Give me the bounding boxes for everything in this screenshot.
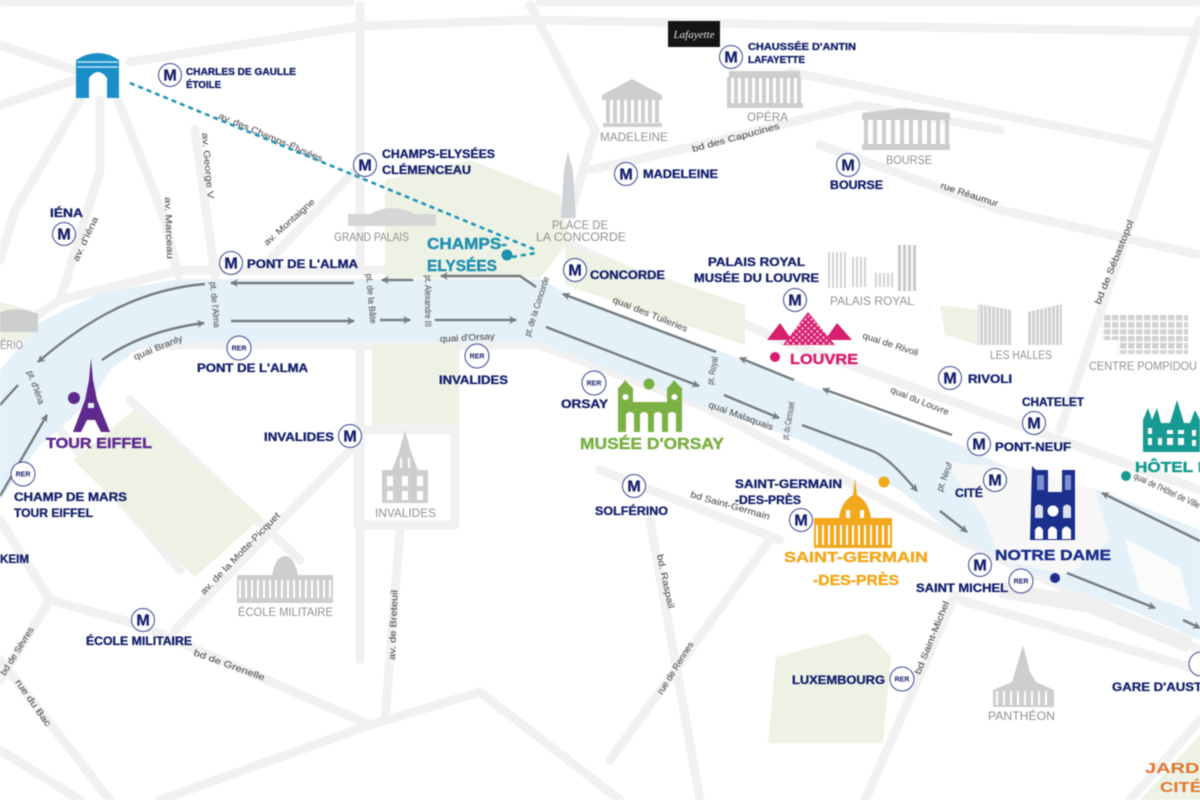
station: Bir-Hakeim: KEIM [0,552,29,566]
south quay [1000,590,1190,645]
station: Concorde: M [568,262,582,280]
street names: bd de Sébastopol [1093,219,1136,306]
label: Jardin Cité: CITÉ [1160,779,1200,796]
station: Iéna [50,205,83,246]
station: Rivoli: M [943,370,957,388]
station: Pont-Neuf: M [972,436,986,454]
icon: Trocadéro: ÉRIO [0,337,23,352]
station: Charles de Gaulle Étoile: M [163,68,177,84]
station: Champs-Élysées Clemenceau: CLÉMENCEAU [382,162,471,177]
icon: Bourse: BOURSE [886,153,932,167]
station: Invalides (métro): M [343,428,357,446]
dashed route: Champs-Élysées [130,83,536,250]
street names: pt. Alexandre III [423,275,433,327]
station: Orsay (RER): ORSAY [561,397,608,411]
station: Invalides (métro): INVALIDES [264,430,334,444]
street names: av. d'Iéna [71,215,100,263]
station: Champs-Élysées Clemenceau: CHAMPS-ELYSÉES [382,146,495,161]
street names: pt. de l'Alma [208,281,222,328]
station: Concorde [564,258,665,282]
icon: Les Halles [978,304,1062,362]
street names: av. des Champs-Élysées [217,111,325,164]
icon: École Militaire: ÉCOLE MILITAIRE [238,604,333,619]
station: Bourse [830,154,883,192]
station: Madeleine [614,162,718,186]
street names: rue de Rennes [655,639,696,696]
icon: Palais Royal: PALAIS ROYAL [830,294,914,308]
station: Gare d'Austerlitz: GARE D'AUST [1112,680,1200,694]
dashed route end [512,253,536,257]
station: Concorde: CONCORDE [590,268,665,282]
label: Champs-Élysées [427,236,512,275]
icon: Grand Palais: GRAND PALAIS [334,230,409,244]
street names: quai d'Orsay [440,331,496,344]
Île de la Cité [945,462,1110,575]
station: Chaussée d'Antin Lafayette: M [724,50,738,66]
station: Palais Royal Musée du Louvre: M [788,292,802,310]
arrows: Seine boat route [0,276,1200,628]
station: Luxembourg: RER [895,676,909,684]
label: Place de la Concorde [536,218,626,244]
station: Pont de l'Alma (métro) [220,252,358,274]
station: Invalides (RER) [439,344,508,387]
label: Place de la Concorde: LA CONCORDE [536,230,626,244]
street names: quai Malaquais [707,399,775,432]
icon: Bourse [862,108,950,167]
station: Madeleine: MADELEINE [643,167,718,181]
icon: Arc de Triomphe [76,53,119,98]
icon: Hôtel de Ville: HÔTEL D [1135,458,1200,476]
station: Pont-Neuf: PONT-NEUF [995,440,1071,454]
station: Invalides (métro) [264,424,362,448]
station: Chaussée d'Antin Lafayette [720,40,856,68]
icon: obélisque Concorde [561,152,576,218]
icon: Opéra: OPÉRA [747,109,788,124]
street names: rue du Bac [13,677,53,729]
street names: pt. Royal [705,356,720,385]
label: Jardin Cité [1145,760,1200,796]
station: Chatelet [1022,395,1085,434]
station: Pont de l'Alma (métro): M [224,256,238,272]
station: École Militaire: ÉCOLE MILITAIRE [86,633,192,648]
street names: bd de Grenelle [192,647,266,683]
icon: Hôtel de Ville [1121,400,1200,481]
label: Champs-Élysées: ELYSÉES [427,256,497,275]
station: Orsay (RER): RER [587,380,601,388]
icon: Tour Eiffel [46,358,152,452]
station: Saint Michel: RER [1014,578,1028,586]
icon: Invalides [375,430,436,520]
station: Orsay (RER) [561,371,608,411]
Seine river [0,279,1200,640]
street names: pt. de la Bâte [364,273,378,324]
station: Pont de l'Alma (RER): RER [232,346,246,352]
icon: Invalides: INVALIDES [375,506,436,520]
street names: pt. du Carrousel [780,401,797,440]
station: Saint Michel: M [973,558,987,574]
station: Saint-Germain-des-Prés: M [794,512,808,530]
station: Bourse: M [841,158,855,174]
icon: Palais Royal [828,268,916,308]
label: Place de la Concorde: PLACE DE [552,218,608,232]
station: Saint Michel [916,554,1033,595]
station: Solférino: SOLFÉRINO [595,503,668,518]
station: Gare d'Austerlitz [1112,652,1200,694]
station: Chaussée d'Antin Lafayette: CHAUSSÉE D'ANTIN [748,40,856,53]
station: Luxembourg: LUXEMBOURG [792,673,885,687]
icon: Les Halles: LES HALLES [990,348,1052,362]
station: Invalides (RER): RER [470,354,484,360]
station: Cité: M [988,472,1002,490]
station: Saint-Germain-des-Prés: SAINT-GERMAIN [735,477,842,491]
icon: Tour Eiffel: TOUR EIFFEL [46,435,152,452]
station: Palais Royal Musée du Louvre: MUSÉE DU LOUVRE [694,270,819,285]
street names [0,111,1200,729]
icon: Opéra [727,71,803,124]
station: Luxembourg [792,667,914,691]
street names: rue Réaumur [939,180,1000,208]
icon: Panthéon: PANTHÉON [988,708,1055,723]
station: Madeleine: M [619,166,633,184]
station: Champ de Mars Tour Eiffel: TOUR EIFFEL [14,506,93,520]
green areas [0,160,1200,800]
station: Chatelet: M [1027,416,1041,432]
station: Saint Michel: SAINT MICHEL [916,581,1008,595]
Île Saint-Louis [1125,538,1192,612]
street names: bd. Raspail [655,553,676,609]
station: Chaussée d'Antin Lafayette: LAFAYETTE [748,55,805,66]
station: Iéna: M [57,226,71,244]
street names: pt. de la Concorde [522,276,551,338]
icon: Trocadéro [0,309,38,352]
street names: pt. d'Iéna [25,369,46,406]
station: Champ de Mars Tour Eiffel: CHAMP DE MARS [14,490,127,504]
black label: Galeries Lafayette: Lafayette [673,29,715,41]
icon: Musée d'Orsay: MUSÉE D'ORSAY [580,436,725,453]
street names: pt. Neuf [934,461,954,493]
station: Cité [955,468,1006,500]
station: Palais Royal Musée du Louvre [694,255,819,312]
station: Champs-Élysées Clemenceau: M [358,158,372,174]
station: Saint-Germain-des-Prés: -DES-PRÈS [735,492,801,507]
icon: Louvre pyramid: LOUVRE [790,351,858,368]
icon: Madeleine: MADELEINE [600,130,668,144]
black label: Galeries Lafayette [668,21,720,47]
station: Charles de Gaulle Étoile: CHARLES DE GAULLE [186,67,296,78]
icon: Grand Palais [334,208,436,244]
street names: quai Branly [132,333,184,362]
street names: quai de Rivoli [861,330,920,358]
station: Solférino [595,474,668,518]
station: Cité: CITÉ [955,485,983,500]
station: Pont de l'Alma (RER) [197,336,308,375]
icon: Notre Dame [995,466,1111,583]
icon: Saint-Germain-des-Prés: -DES-PRÈS [813,572,899,589]
label: Jardin Cité: JARDI [1145,760,1200,777]
station: École Militaire: M [136,612,150,630]
icon: Louvre pyramid [767,312,858,368]
street names: av. George V [200,132,216,199]
street names: av. de la Motte-Picquet [198,510,282,596]
icon: Saint-Germain-des-Prés: SAINT-GERMAIN [784,549,928,566]
station: Charles de Gaulle Étoile [158,64,296,91]
street names: av. de Breteuil [387,590,399,660]
station: Invalides (RER): INVALIDES [439,373,508,387]
icon: Musée d'Orsay [580,378,725,453]
label: Champs-Élysées: CHAMPS- [427,236,507,253]
station: Champs-Élysées Clemenceau [354,146,495,177]
station: Rivoli: RIVOLI [968,372,1012,386]
icon: Centre Pompidou [1089,314,1197,373]
street names: bd des Capucines [691,121,781,154]
station: Charles de Gaulle Étoile: ÉTOILE [186,78,221,91]
icon: Panthéon [988,645,1055,723]
station: École Militaire [86,608,192,648]
station: Chatelet: CHATELET [1022,395,1085,409]
icon: Madeleine [600,79,668,144]
icon: Notre Dame: NOTRE DAME [995,547,1111,564]
station: Rivoli [938,366,1012,390]
station: Solférino: M [627,478,641,496]
street names: quai des Tuileries [611,295,690,334]
street names: quai du Louvre [889,385,950,417]
street names: bd Saint-Michel [913,600,951,676]
street names: av. Marceau [163,197,175,259]
station: Champ de Mars Tour Eiffel [11,462,127,520]
station: Pont de l'Alma (RER): PONT DE L'ALMA [197,361,308,375]
icon: École Militaire [237,556,333,619]
station: Saint-Germain-des-Prés [735,477,842,532]
icon: Saint-Germain-des-Prés [784,476,928,589]
station: Palais Royal Musée du Louvre: PALAIS ROYAL [708,255,805,269]
station: Pont-Neuf [968,432,1071,456]
street names: bd Saint-Germain [689,489,771,522]
station: Bourse: BOURSE [830,178,883,192]
station: Pont de l'Alma (métro): PONT DE L'ALMA [247,257,358,271]
station: Champ de Mars Tour Eiffel: RER [16,472,30,478]
station: Iéna: IÉNA [50,205,83,220]
street names: av. Montaigne [262,197,317,247]
